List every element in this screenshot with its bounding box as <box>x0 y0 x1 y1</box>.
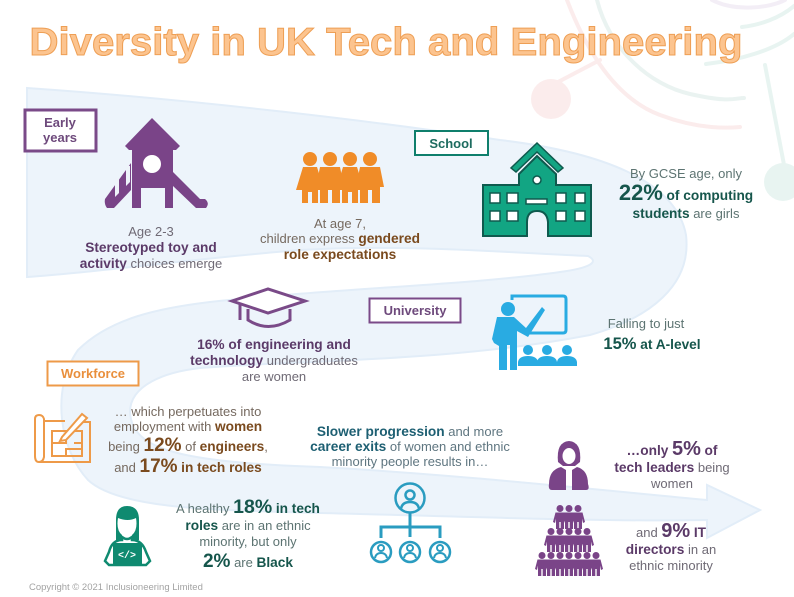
label: university: University <box>384 303 447 318</box>
text: engineers: … which perpetuates into <box>115 404 261 419</box>
text: tech leaders <box>614 438 730 491</box>
icon: teacher <box>492 296 577 370</box>
background circuit decoration <box>531 0 794 201</box>
icon: people pyramid <box>535 505 603 576</box>
icon: org chart <box>371 484 450 562</box>
text: IT directors: and 9% IT <box>636 520 707 542</box>
text: undergraduates: are women <box>242 369 306 384</box>
text: GCSE: 22% of computing <box>619 180 753 205</box>
text: age 2-3 <box>80 224 222 271</box>
text: at age 7: children express gendered <box>260 231 420 246</box>
title: Diversity in UK Tech and Engineering <box>30 21 742 64</box>
text: at age 7: At age 7, <box>314 216 366 231</box>
text: engineers: employment with women <box>114 419 262 434</box>
icon: blueprint <box>35 414 90 462</box>
text: ethnic minority: minority, but only <box>199 534 297 549</box>
text: A-level: Falling to just <box>608 316 685 331</box>
label: university <box>370 298 460 322</box>
label: workforce <box>48 362 138 386</box>
text: undergraduates <box>190 337 358 384</box>
icon: graduation cap <box>232 289 305 326</box>
text: at age 7 <box>260 216 420 262</box>
text: ethnic minority: A healthy 18% in tech <box>176 496 320 518</box>
journey arrow band <box>27 88 760 538</box>
icon: coder <box>105 506 150 565</box>
text: A-level: 15% at A-level <box>603 335 701 353</box>
text: ethnic minority: 2% are Black <box>203 551 293 572</box>
text: slower progression <box>310 424 510 469</box>
text: ethnic minority: roles are in an ethnic <box>185 518 311 533</box>
text: age 2-3: activity choices emerge <box>80 256 222 271</box>
label: workforce: Workforce <box>61 366 125 381</box>
text: age 2-3: Stereotyped toy and <box>85 240 217 255</box>
text: undergraduates: 16% of engineering and <box>197 337 351 352</box>
label: early years: Early <box>44 115 77 130</box>
text: GCSE: students are girls <box>633 206 740 221</box>
icon: coder: </> <box>118 550 136 562</box>
text: undergraduates: technology undergraduates <box>190 353 358 368</box>
text: slower progression: career exits of women and ethnic <box>310 439 510 454</box>
text: IT directors: ethnic minority <box>629 558 713 573</box>
label: school <box>415 131 488 155</box>
text: tech leaders: women <box>650 476 693 491</box>
icon: four children <box>296 152 384 203</box>
label: school: School <box>429 136 473 151</box>
text: IT directors: directors in an <box>626 542 716 557</box>
text: A-level <box>603 316 701 353</box>
label: early years: years <box>43 130 77 145</box>
text: GCSE <box>619 166 753 221</box>
text: age 2-3: Age 2-3 <box>128 224 174 239</box>
icon: playground slide <box>105 118 208 208</box>
text: engineers <box>108 404 268 477</box>
text: engineers: being 12% of engineers, <box>108 435 268 456</box>
text: slower progression: minority people results in… <box>332 454 488 469</box>
text: tech leaders: …only 5% of <box>627 438 718 460</box>
text: at age 7: role expectations <box>284 247 397 262</box>
label: early years <box>25 110 96 151</box>
text: GCSE: By GCSE age, only <box>630 166 742 181</box>
text: ethnic minority <box>176 496 320 572</box>
copyright: Copyright © 2021 Inclusioneering Limited <box>29 582 203 593</box>
icon: school building <box>483 143 591 236</box>
text: slower progression: Slower progression and more <box>317 424 503 439</box>
text: IT directors <box>626 520 716 573</box>
text: tech leaders: tech leaders being <box>614 460 730 475</box>
icon: woman leader <box>549 441 589 490</box>
text: engineers: and 17% in tech roles <box>114 456 262 477</box>
